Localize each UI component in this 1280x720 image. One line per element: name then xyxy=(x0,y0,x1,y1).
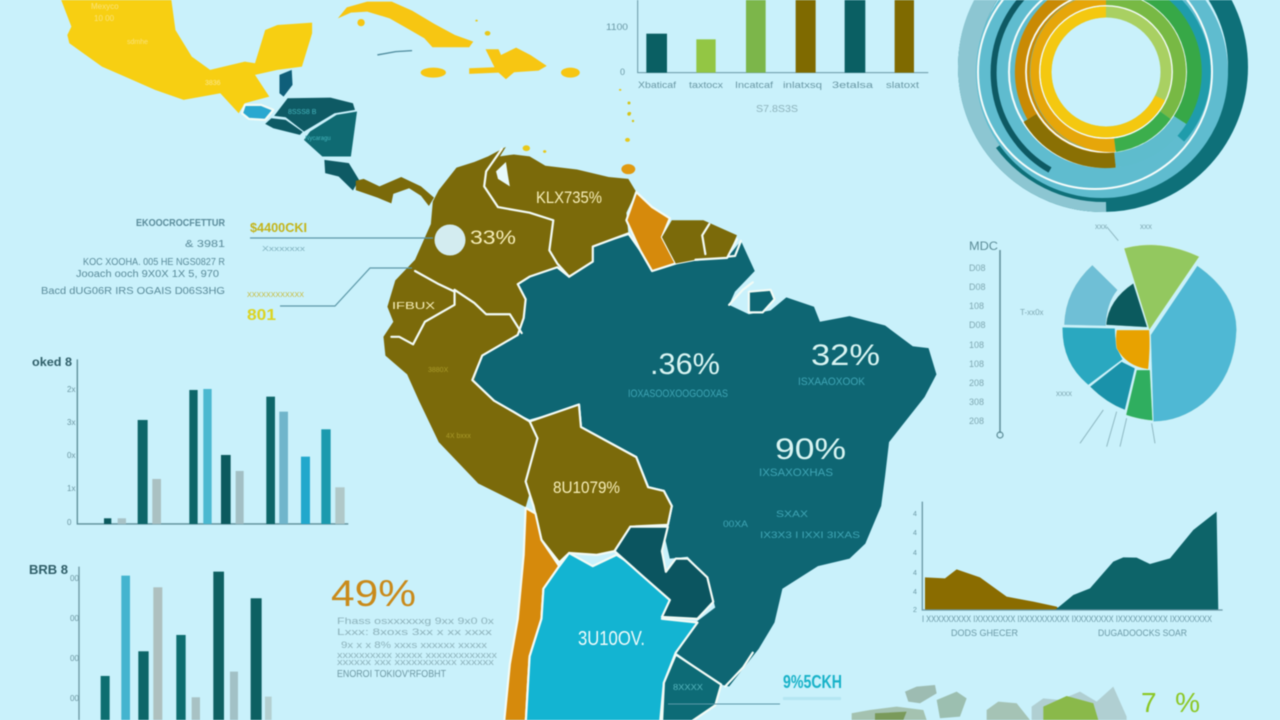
chart title: BRB 8 xyxy=(29,562,68,577)
white line inner xyxy=(1026,0,1186,152)
Guatemala xyxy=(242,105,273,120)
pie labels: xxxx xyxy=(1056,389,1072,398)
y axis ticks: 4 xyxy=(913,511,917,518)
Brazil xyxy=(474,235,936,686)
callout: yellow value top: Xxxxxxxx xyxy=(262,246,306,253)
gold ring left xyxy=(1037,0,1115,145)
Brazil sublabel 32: ISXAAOXOOK xyxy=(798,376,866,388)
y axis ticks: 4 xyxy=(913,570,917,577)
Bolivia value: 8U1079% xyxy=(553,478,620,497)
Colombia value: 33% xyxy=(470,228,516,249)
Argentina value: 3U10OV. xyxy=(578,628,645,650)
y axis labels: 3x xyxy=(67,418,75,427)
center hole xyxy=(1041,7,1171,137)
dark arc left xyxy=(994,0,1050,170)
Brazil small labels: SXAX xyxy=(776,509,808,519)
stat: 7 percent: 7 % xyxy=(1141,687,1200,718)
scattered dots xyxy=(627,102,634,122)
Brazil small labels: 00XA xyxy=(723,519,748,529)
Central America label text xyxy=(288,109,331,142)
Cuba xyxy=(338,2,473,47)
callout: yellow value bottom: XXXXXXXXXXXX xyxy=(247,292,304,299)
Argentina xyxy=(526,553,697,720)
Mexico label text: 10 00 xyxy=(94,14,115,23)
mini map bottom right xyxy=(852,685,1127,720)
Colombia marker circle xyxy=(434,224,466,256)
pale green ring xyxy=(1046,12,1166,132)
y axis ticks xyxy=(913,511,917,614)
Mexico xyxy=(61,0,312,113)
Brazil value 32: 32% xyxy=(811,339,880,372)
x axis labels: I XXXXXXXXX IXXXXXXXX IXXXXXXXXXX IXXXXXXXX IXXXXXXXXXX IXXXXXXXX xyxy=(922,614,1212,624)
light blue ring lower right xyxy=(1115,120,1180,160)
stat description: ENOROI TOKIOV'RFOBHT xyxy=(337,669,446,680)
Brazil sublabel 90: IXSAXOXHAS xyxy=(759,467,833,479)
text block: left description: KOC XOOHA. 005 HE NGS0827 R xyxy=(83,257,225,268)
Brazil small labels: IX3X3 I IXXI 3IXAS xyxy=(760,530,860,540)
callout: yellow value bottom xyxy=(247,292,304,324)
Bolivia xyxy=(526,404,672,562)
y axis labels: 1x xyxy=(67,484,75,493)
stat description: xxxxxx xxx xxxxxxxxxxx xxxxxx xyxy=(337,657,495,667)
leader lines xyxy=(1080,227,1155,447)
pie labels: xxx xyxy=(1095,222,1107,231)
text block: left description: Bacd dUG06R IRS OGAIS D06S3HG xyxy=(41,286,225,297)
Ecuador border xyxy=(391,271,455,344)
stat description: Lxxx: 8xoxs 3xx x xx xxxx xyxy=(337,627,493,637)
brown ring lower left xyxy=(1030,118,1115,161)
slice: large blue xyxy=(1151,266,1237,422)
bar chart: left lower xyxy=(29,562,272,720)
northern Andean countries xyxy=(383,147,636,507)
axis ticks: 108 xyxy=(969,301,984,311)
x axis labels: Incatcaf xyxy=(735,80,774,90)
Guyana xyxy=(626,192,676,271)
y axis labels xyxy=(606,22,628,77)
Mexico label text xyxy=(91,2,221,87)
slice: teal xyxy=(1062,327,1123,385)
x axis labels: Xbaticaf xyxy=(638,80,677,90)
y axis ticks: 2 xyxy=(913,607,917,614)
green ring right xyxy=(1106,0,1194,120)
Amazon delta xyxy=(749,290,774,312)
Mexico label text: Mexyco xyxy=(91,2,119,11)
x axis labels xyxy=(638,80,920,90)
slice: orange xyxy=(1116,330,1150,369)
lime ring right xyxy=(1106,0,1179,115)
Lake Maracaibo xyxy=(496,162,510,186)
bar chart: left upper xyxy=(32,355,348,527)
callout: yellow value top xyxy=(250,220,307,253)
white outer line xyxy=(978,0,1212,189)
y axis labels: 0 xyxy=(67,518,72,527)
inner dark band lower left xyxy=(1000,145,1106,197)
axis ticks xyxy=(969,263,986,426)
axis title: S7.8S3S xyxy=(756,104,798,115)
Brazil sublabel 36: IOXASOOXOOGOOXAS xyxy=(628,388,728,400)
stat: 49 percent xyxy=(331,573,498,680)
Mexico label text: 3836 xyxy=(205,80,221,87)
text block: left description: & 3981 xyxy=(185,239,226,250)
Brazil value 90: 90% xyxy=(775,433,846,466)
Central America label text: 8SSS8 B xyxy=(288,109,317,116)
outer band dark xyxy=(968,0,1238,202)
axis ticks: 108 xyxy=(969,340,984,350)
y axis labels: 00 xyxy=(70,614,79,623)
chart: area xyxy=(913,502,1223,638)
Uruguay leader xyxy=(668,703,780,705)
Puerto Rico xyxy=(561,68,580,78)
leader line Ecuador xyxy=(280,268,412,306)
Costa Rica xyxy=(324,160,359,190)
Peru Colombia border xyxy=(455,290,522,333)
slice: green xyxy=(1126,370,1153,421)
y axis ticks: 4 xyxy=(913,530,917,537)
scale axis beside pie xyxy=(969,239,1003,438)
slice: lime xyxy=(1124,245,1199,330)
small Caribbean islands xyxy=(475,20,631,153)
axis ticks: 208 xyxy=(969,378,984,388)
x axis labels: taxtocx xyxy=(689,80,724,90)
axis ticks: D08 xyxy=(969,320,986,330)
Nicaragua xyxy=(304,112,357,157)
green ring lower right xyxy=(1115,115,1165,145)
Peru labels xyxy=(428,367,471,440)
slice: light blue xyxy=(1064,265,1118,326)
Brazil small labels xyxy=(723,509,860,540)
axis ticks: D08 xyxy=(969,263,986,273)
Colombia Venezuela border xyxy=(484,149,569,277)
orange ring left xyxy=(1022,0,1115,160)
y axis ticks: 4 xyxy=(913,550,917,557)
callout: yellow value top: $4400CKI xyxy=(250,220,307,235)
axis caption left: DODS GHECER xyxy=(951,628,1018,638)
text block: left description: Jooach ooch 9X0X 1X 5, 970 xyxy=(76,269,219,280)
El Salvador xyxy=(265,118,303,135)
axis title: MDC xyxy=(969,239,998,253)
Mexico label text: sdmhe xyxy=(127,39,148,46)
y axis labels: 00 xyxy=(70,654,79,663)
y axis labels: 0x xyxy=(67,451,75,460)
axis ticks: 308 xyxy=(969,397,984,407)
Uruguay label: 8XXXX xyxy=(673,683,704,692)
x axis labels: slatoxt xyxy=(886,80,920,90)
Paraguay xyxy=(615,527,713,619)
y axis labels: 00 xyxy=(70,574,79,583)
y axis labels: 2x xyxy=(67,385,75,394)
y axis labels xyxy=(70,574,79,703)
white line innermost xyxy=(1040,6,1172,138)
x axis labels: 3etalsa xyxy=(832,80,873,90)
chart: pie xyxy=(1020,222,1237,447)
x axis labels: inlatxsq xyxy=(783,80,822,90)
y axis labels: 1100 xyxy=(606,22,628,32)
light blue disc xyxy=(976,0,1228,198)
axis ticks: 208 xyxy=(969,416,984,426)
y axis labels xyxy=(67,385,75,527)
pie labels xyxy=(1020,222,1152,398)
map: Mexico, Central America and Caribbean xyxy=(61,0,635,190)
pie labels: T-xx0x xyxy=(1020,308,1044,317)
Brazil border xyxy=(472,233,741,525)
Belize xyxy=(279,70,293,97)
pie labels: xxx xyxy=(1140,222,1152,231)
Hispaniola xyxy=(469,48,547,79)
white line middle xyxy=(1009,0,1199,167)
Venezuela value: KLX735% xyxy=(536,188,602,207)
slice: dark xyxy=(1106,283,1147,327)
text block: left description: EKOOCROCFETTUR xyxy=(136,218,226,229)
Atlantic coast highlight xyxy=(725,653,753,686)
Suriname and French Guiana xyxy=(662,220,737,263)
axis ticks: 108 xyxy=(969,359,984,369)
Ecuador value: IFBUX xyxy=(392,301,435,312)
text block: left description xyxy=(41,218,226,297)
leader line Colombia xyxy=(250,237,433,239)
callout: Uruguay value: 9%5CKH xyxy=(783,672,842,692)
Peru labels: 4X bxxx xyxy=(446,433,471,440)
chart title: oked 8 xyxy=(32,355,72,369)
callout: yellow value bottom: 801 xyxy=(247,307,276,324)
y axis labels: 00 xyxy=(70,694,79,703)
stat description: xxxxxxxxxx xxxxx xxxxxxxxxxxxx xyxy=(337,650,498,660)
yellow ring xyxy=(1046,12,1160,132)
stat description: Fhass osxxxxxxg 9xx 9x0 0x xyxy=(337,616,495,626)
stat: 49 percent: 49% xyxy=(331,573,416,614)
bar chart: top center xyxy=(606,0,928,122)
y axis ticks: 4 xyxy=(913,589,917,596)
Panama xyxy=(356,177,434,206)
Central America label text: Nycaragu xyxy=(305,136,331,142)
axis caption right: DUGADOOCKS SOAR xyxy=(1098,628,1187,638)
y axis labels: 0 xyxy=(620,67,625,77)
stat description xyxy=(337,616,498,680)
Isle of Youth xyxy=(357,19,365,26)
map: South America xyxy=(250,147,936,720)
Jamaica xyxy=(421,68,446,78)
chart: concentric donut xyxy=(968,0,1238,202)
teal ring right xyxy=(1106,0,1205,138)
Honduras xyxy=(274,98,355,132)
axis ticks: D08 xyxy=(969,282,986,292)
outer band light xyxy=(968,0,1106,202)
Peru labels: 3880X xyxy=(428,367,449,374)
stat description: 9x x x 8% xxxs xxxxxx xxxxx xyxy=(341,640,488,650)
callout: Uruguay value xyxy=(783,672,842,700)
Uruguay xyxy=(662,655,721,720)
Brazil value 36: .36% xyxy=(650,348,720,381)
Chile xyxy=(504,508,559,720)
slice: deep teal xyxy=(1090,362,1135,410)
